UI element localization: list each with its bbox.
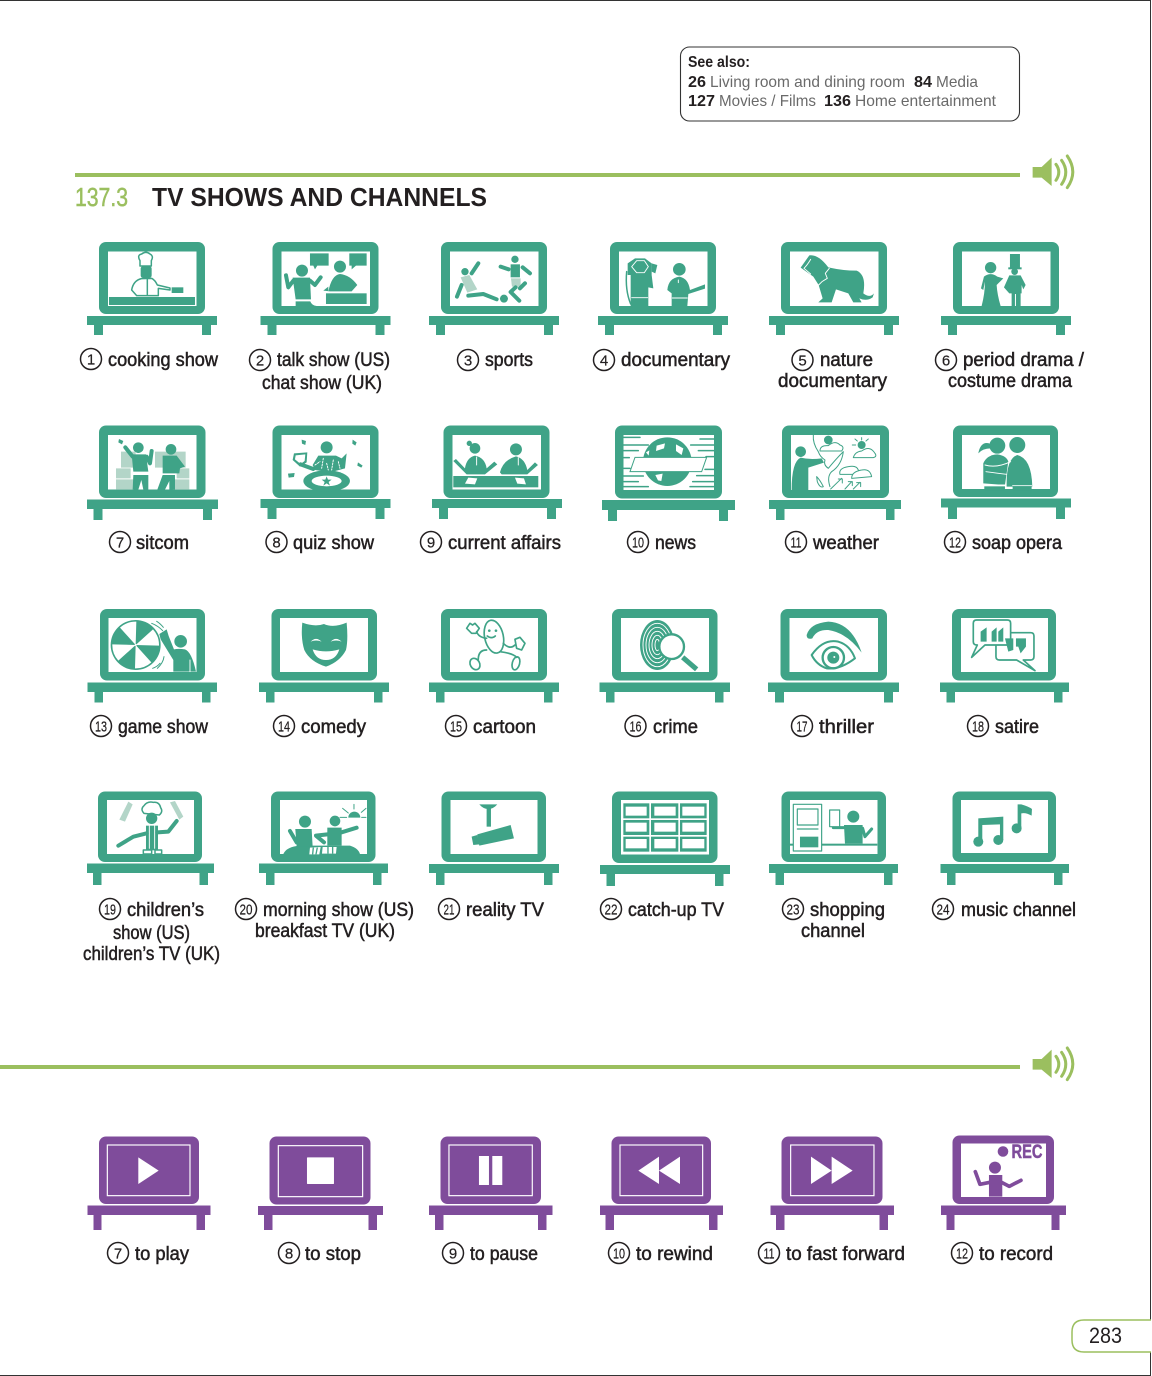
label: to record: 12 (956, 1246, 968, 1262)
label: children's show: children’s TV (UK) (83, 944, 220, 965)
label: game show (90, 716, 208, 738)
TV: catch-up TV (600, 792, 730, 886)
TV: weather (769, 426, 901, 520)
label: music channel: music channel (961, 900, 1076, 921)
item 2: talk show (250, 242, 390, 394)
label: crime: crime (653, 717, 698, 738)
label: nature documentary: 5 (798, 352, 807, 370)
see also box: Movies / Films (719, 93, 816, 110)
item 16: crime (600, 609, 730, 738)
see also box: See also: (688, 54, 750, 71)
see also box: Living room and dining room (710, 74, 905, 91)
icon: speaker top (1033, 156, 1073, 188)
label: cartoon: cartoon (473, 717, 536, 738)
label: crime: 16 (630, 718, 642, 736)
control: to stop (258, 1136, 383, 1265)
label: quiz show (266, 532, 374, 554)
label: shopping channel (782, 898, 885, 942)
TV: documentary (598, 242, 728, 335)
label: cartoon (446, 716, 536, 738)
TV: cartoon (429, 609, 559, 702)
label: shopping channel: shopping (810, 900, 885, 921)
see also box: Home entertainment (855, 93, 997, 110)
item 11: weather (769, 426, 901, 554)
label: to play: to play (135, 1244, 189, 1265)
label: nature documentary: nature (820, 350, 873, 371)
label: weather (786, 532, 880, 554)
label: to record (952, 1242, 1053, 1265)
label: soap opera (944, 532, 1062, 554)
label: news: 10 (632, 534, 644, 552)
item 8: quiz show (260, 426, 390, 554)
TV: soap opera (941, 426, 1071, 519)
TV: period drama (941, 242, 1071, 335)
icon: speaker controls (1033, 1048, 1073, 1080)
label: talk show (250, 350, 390, 394)
label: music channel: 24 (936, 902, 950, 918)
label: morning show: 20 (240, 902, 252, 918)
label: catch-up TV: 22 (604, 902, 618, 918)
section title: TV SHOWS AND CHANNELS (152, 182, 487, 212)
label: satire (968, 716, 1039, 738)
control: to record (941, 1136, 1066, 1265)
item 10: news (602, 426, 735, 554)
label: documentary: documentary (621, 350, 730, 371)
page number tab: 283 (1089, 1323, 1122, 1348)
TV: news (602, 426, 735, 521)
item 15: cartoon (429, 609, 559, 738)
label: sports: sports (485, 350, 533, 371)
control: to play (88, 1136, 210, 1265)
label: talk show: talk show (US) (277, 350, 390, 371)
TV: sitcom (87, 426, 218, 520)
TV: rewind symbol (600, 1136, 723, 1230)
label: period drama (936, 350, 1085, 392)
item 18: satire (940, 609, 1069, 738)
label: catch-up TV (600, 898, 724, 921)
item 1: cooking show (80, 242, 218, 371)
label: catch-up TV: catch-up TV (628, 900, 724, 921)
label: nature documentary: documentary (778, 371, 887, 392)
TV: sports (429, 242, 559, 335)
TV: reality TV (429, 792, 559, 885)
label: satire: satire (995, 717, 1039, 738)
TV: children's show (87, 792, 214, 885)
item 4: documentary (594, 242, 730, 371)
TV: cooking show (87, 242, 217, 335)
control: to pause (429, 1136, 552, 1265)
label: cooking show: 1 (87, 352, 95, 368)
see also box: 84 (914, 74, 932, 91)
TV: game show (88, 609, 217, 702)
label: shopping channel: channel (801, 921, 865, 942)
TV: morning show (259, 792, 388, 885)
control: to rewind (600, 1136, 723, 1265)
label: to fast forward: 11 (764, 1246, 774, 1262)
TV: quiz show (260, 426, 390, 519)
label: cooking show: cooking show (108, 350, 218, 371)
section title: 137.3 (75, 182, 128, 212)
label: to pause: 9 (449, 1246, 457, 1262)
TV: crime (600, 609, 730, 702)
label: talk show: 2 (256, 352, 264, 370)
item 24: music channel (932, 792, 1076, 921)
label: game show: game show (118, 717, 208, 738)
TV: comedy (259, 609, 389, 702)
label: sports (458, 350, 533, 371)
label: children's show: show (US) (113, 923, 190, 944)
label: morning show (236, 898, 414, 942)
item 22: catch-up TV (600, 792, 730, 921)
item 6: period drama (936, 242, 1085, 392)
label: reality TV: reality TV (466, 900, 544, 921)
label: sitcom (110, 532, 189, 554)
label: talk show: chat show (UK) (262, 373, 382, 394)
item 9: current affairs (420, 426, 562, 554)
see also box: Media (936, 74, 978, 91)
label: to rewind: to rewind (636, 1244, 713, 1265)
label: nature documentary (778, 350, 887, 392)
label: children's show (83, 898, 220, 965)
label: reality TV (438, 898, 544, 921)
TV: shopping channel (769, 792, 898, 885)
item 17: thriller (768, 609, 899, 738)
item 5: nature documentary (769, 242, 899, 392)
label: to stop: 8 (285, 1246, 293, 1262)
label: to stop: to stop (305, 1244, 361, 1265)
see also box: 127 (688, 93, 715, 110)
label: children's show: 19 (104, 902, 116, 918)
label: current affairs: 9 (427, 534, 435, 552)
item 19: children's show (83, 792, 220, 965)
label: quiz show: quiz show (293, 533, 374, 554)
label: children's show: children’s (127, 900, 204, 921)
label: sports: 3 (464, 352, 472, 370)
label: thriller: 17 (796, 718, 808, 736)
label: sitcom: sitcom (136, 533, 189, 554)
TV: pause symbol (429, 1136, 552, 1230)
label: to fast forward: to fast forward (786, 1244, 905, 1265)
label: weather: 11 (790, 534, 802, 552)
item 13: game show (88, 609, 217, 738)
see also box (680, 47, 1020, 121)
TV: music channel (940, 792, 1069, 885)
label: reality TV: 21 (444, 902, 454, 918)
label: shopping channel: 23 (786, 902, 800, 918)
label: comedy: comedy (301, 717, 366, 738)
item 3: sports (429, 242, 559, 371)
label: thriller: thriller (819, 717, 875, 738)
label: thriller (792, 716, 875, 738)
item 7: sitcom (87, 426, 218, 554)
label: period drama: period drama / (963, 350, 1085, 371)
label: morning show: breakfast TV (UK) (255, 921, 395, 942)
label: to pause (442, 1242, 538, 1265)
control: to fast forward (758, 1136, 905, 1265)
label: satire: 18 (972, 718, 984, 736)
label: comedy: 14 (278, 718, 290, 736)
label: to record: to record (979, 1244, 1053, 1265)
label: period drama: 6 (942, 352, 950, 370)
label: documentary: 4 (600, 352, 608, 370)
TV: current affairs (432, 426, 562, 519)
label: soap opera: soap opera (972, 533, 1062, 554)
item 14: comedy (259, 609, 389, 738)
label: morning show: morning show (US) (263, 900, 414, 921)
TV: satire (940, 609, 1069, 702)
label: news (628, 532, 696, 554)
TV: fast forward symbol (770, 1136, 894, 1230)
label: game show: 13 (95, 718, 107, 736)
label: to rewind: 10 (613, 1246, 625, 1262)
item 12: soap opera (941, 426, 1071, 554)
page number tab (1072, 1320, 1151, 1352)
item 21: reality TV (429, 792, 559, 921)
label: comedy (274, 716, 366, 738)
TV: talk show (260, 242, 390, 335)
item 20: morning show (236, 792, 414, 942)
TV: stop symbol (258, 1136, 383, 1230)
section rule: controls (0, 1065, 1020, 1069)
label: to pause: to pause (470, 1244, 538, 1265)
label: to rewind (608, 1242, 713, 1265)
TV: thriller (768, 609, 899, 702)
label: soap opera: 12 (949, 534, 961, 552)
label: sitcom: 7 (116, 534, 124, 552)
label: weather: weather (812, 533, 880, 554)
section rule: top (75, 173, 1020, 177)
TV: nature documentary (769, 242, 899, 335)
TV: play symbol (88, 1136, 210, 1230)
label: quiz show: 8 (272, 534, 281, 552)
label: to play (108, 1242, 189, 1265)
label: current affairs: current affairs (448, 533, 561, 554)
label: crime (625, 716, 698, 738)
label: period drama: costume drama (948, 371, 1072, 392)
see also box: 136 (824, 93, 851, 110)
item 23: shopping channel (769, 792, 898, 942)
TV: record: REC (1012, 1142, 1043, 1163)
label: to stop (278, 1242, 361, 1265)
label: to play: 7 (114, 1246, 122, 1262)
label: cartoon: 15 (450, 718, 462, 736)
see also box: 26 (688, 74, 706, 91)
label: news: news (655, 533, 696, 554)
